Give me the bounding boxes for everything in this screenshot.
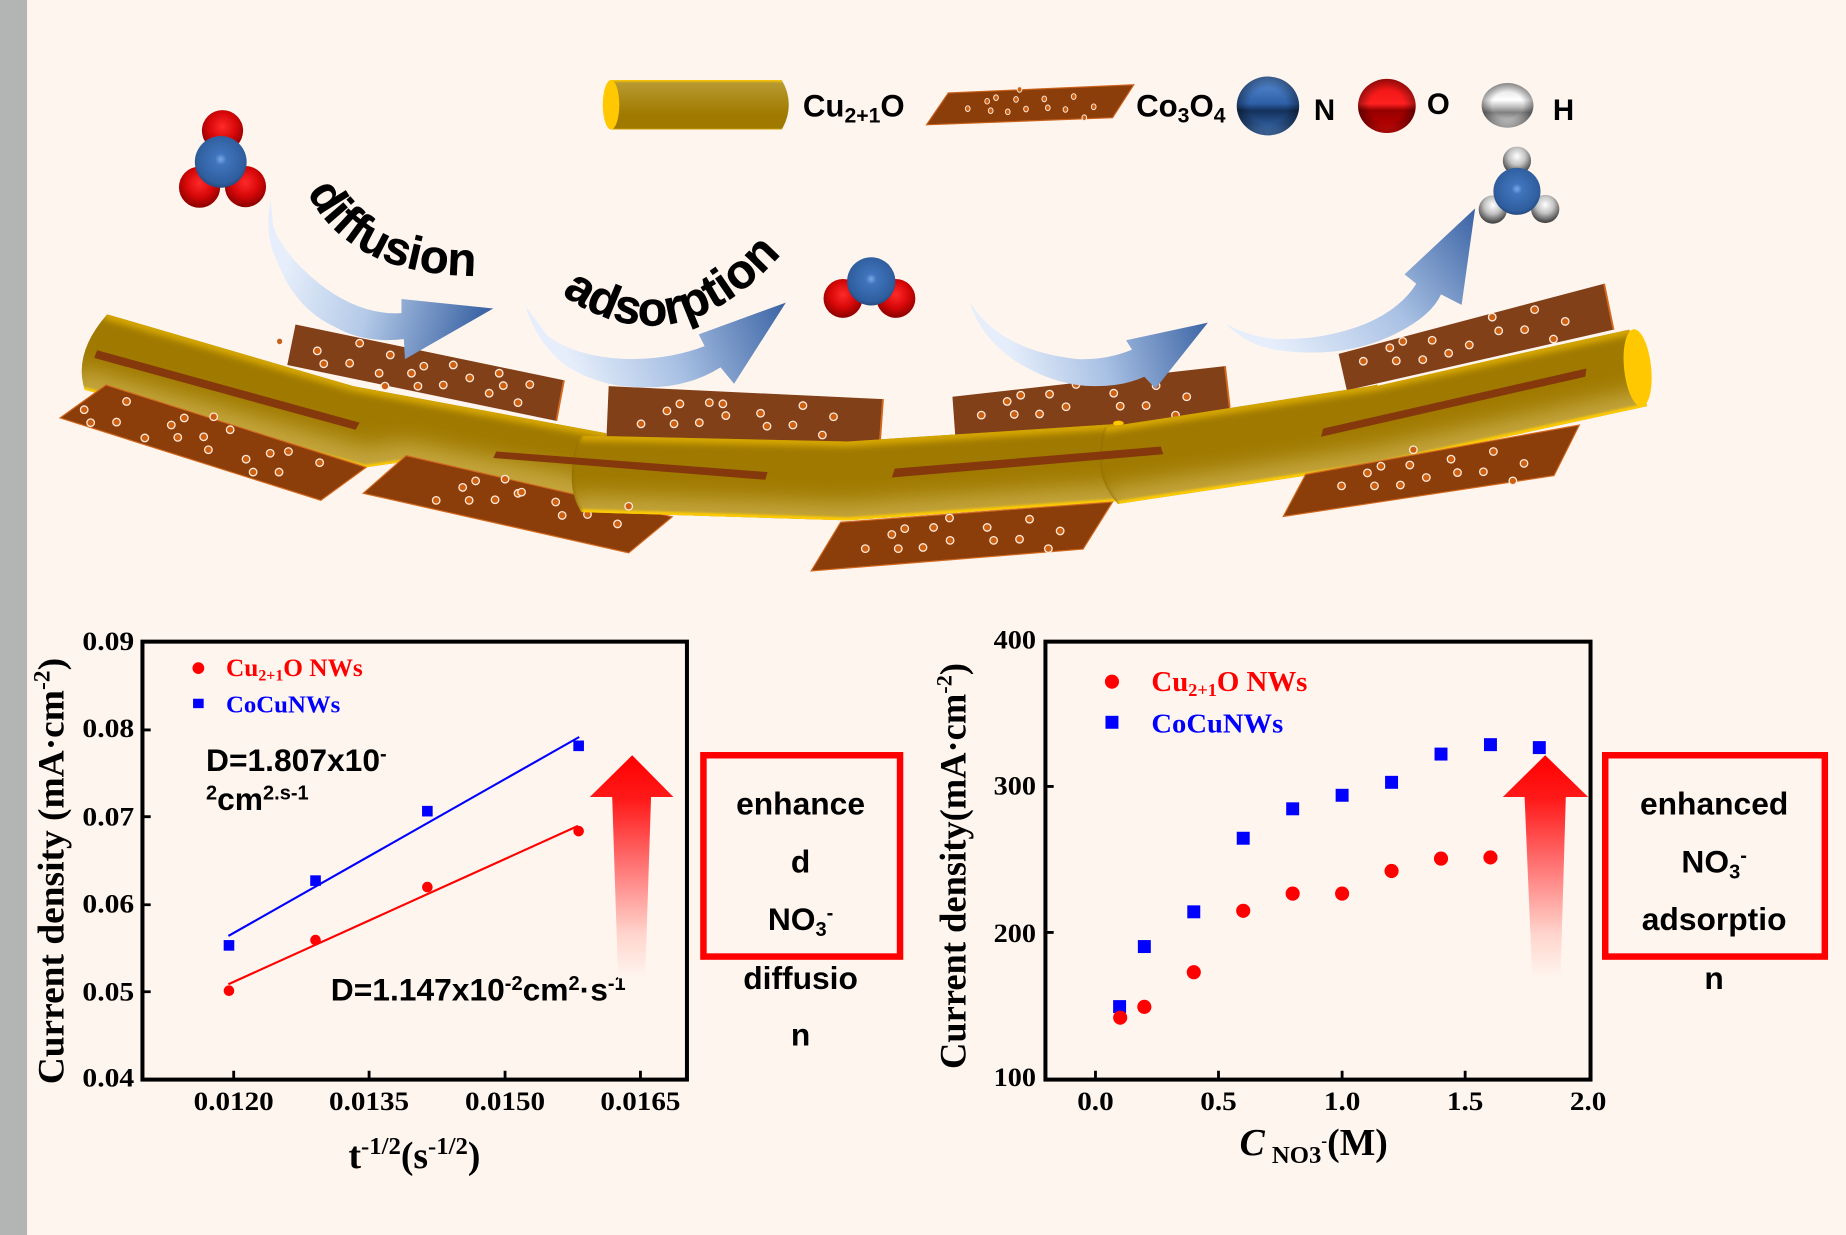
legend: O NWs xyxy=(1217,666,1307,698)
x tick labels: 2.0 xyxy=(1570,1087,1606,1116)
data: Cu2+1O NWs xyxy=(1113,850,1498,1025)
x axis title: ) xyxy=(468,1135,480,1177)
y axis title: -2 xyxy=(29,670,55,690)
legend xyxy=(192,654,363,718)
annotation: D Cu2+1O: -2 xyxy=(505,973,523,995)
x axis title: NO3 xyxy=(1272,1142,1321,1169)
label: adsorption: adsorption xyxy=(564,241,780,330)
data: CoCuNWs xyxy=(224,741,584,951)
annotation: D CoCuNWs: cm xyxy=(217,781,263,817)
annotation: D Cu2+1O: ·s xyxy=(580,972,608,1008)
arrow: diffusion xyxy=(268,200,493,359)
wire stripes xyxy=(94,350,1586,480)
wire end cap xyxy=(1620,328,1655,408)
plate: upper 1 xyxy=(287,324,564,421)
callout: enhanced NO3- diffusion: d xyxy=(791,843,810,879)
callout: enhanced NO3- adsorption: 3 xyxy=(1729,861,1740,883)
chart: diffusion current density xyxy=(29,627,687,1177)
arrow: adsorption xyxy=(526,303,786,387)
callout: enhanced NO3- adsorption xyxy=(1605,755,1825,996)
plate: lower 2 xyxy=(363,456,672,553)
legend label: Co3O4: 4 xyxy=(1214,104,1226,127)
y tick labels xyxy=(82,627,134,1093)
annotation: D Cu2+1O: -1 xyxy=(608,973,626,995)
legend label: Cu2+1O: 2+1 xyxy=(844,104,881,127)
callout: enhanced NO3- diffusion xyxy=(703,755,900,1052)
wire: middle tube xyxy=(572,424,1116,520)
x axis title: - xyxy=(1321,1131,1327,1151)
y tick labels xyxy=(994,626,1036,1092)
callout: enhanced NO3- diffusion: diffusio xyxy=(743,960,858,996)
x tick labels: 0.5 xyxy=(1200,1087,1237,1116)
y tick labels: 0.04 xyxy=(82,1064,134,1093)
plate: lower 4 xyxy=(1283,425,1579,516)
legend xyxy=(603,77,1574,135)
nanowire assembly xyxy=(59,284,1666,571)
x tick labels: 0.0120 xyxy=(194,1087,274,1116)
legend xyxy=(1105,666,1307,738)
legend: 2+1 xyxy=(1188,680,1217,700)
callout: enhanced NO3- adsorption: n xyxy=(1704,960,1724,996)
legend: Cu2+1O cylinder xyxy=(603,80,789,130)
stray particle xyxy=(277,339,282,344)
y axis title: Current density (mA·cm xyxy=(32,690,73,1084)
x axis title: (M) xyxy=(1327,1122,1388,1164)
plot frame and ticks xyxy=(142,642,687,1080)
x tick labels: 1.0 xyxy=(1324,1087,1360,1116)
legend: Co3O4 plate xyxy=(927,85,1134,125)
gap line above wire xyxy=(1377,329,1625,385)
arrow: enhanced diffusion xyxy=(590,755,673,978)
legend label: Co3O4: Co xyxy=(1136,89,1178,124)
plate: upper 2 xyxy=(606,386,883,447)
fit lines xyxy=(228,737,579,984)
callout: enhanced NO3- adsorption: adsorptio xyxy=(1642,901,1787,937)
molecule: NH3 xyxy=(1479,147,1559,224)
legend label: O: O xyxy=(1427,88,1450,121)
y tick labels: 0.05 xyxy=(82,978,134,1007)
legend: H sphere xyxy=(1482,83,1533,128)
callout: enhanced NO3- adsorption: enhanced xyxy=(1640,786,1788,822)
y tick labels: 100 xyxy=(994,1063,1036,1092)
y axis title: Current density(mA·cm xyxy=(932,694,973,1069)
wire: left tube xyxy=(82,314,606,494)
legend: Cu xyxy=(1151,666,1188,698)
annotation: D CoCuNWs xyxy=(206,742,387,817)
callout: enhanced NO3- diffusion: - xyxy=(827,902,833,924)
x axis title: C xyxy=(1240,1122,1266,1164)
y tick labels: 200 xyxy=(994,919,1036,948)
y tick labels: 0.06 xyxy=(82,889,134,918)
callout: enhanced NO3- diffusion: NO xyxy=(768,901,815,937)
legend label: Co3O4: O xyxy=(1189,89,1214,124)
x axis title: (s xyxy=(401,1135,428,1177)
plate: upper 3 xyxy=(952,366,1230,453)
arrow: surface step xyxy=(969,300,1208,389)
chart: adsorption current density xyxy=(931,626,1606,1169)
annotation: D Cu2+1O: D=1.147x10 xyxy=(331,972,505,1008)
legend: N sphere xyxy=(1237,77,1299,135)
legend label: H: H xyxy=(1553,94,1574,127)
annotation: D CoCuNWs: 2 xyxy=(206,782,217,804)
callout: enhanced NO3- diffusion: enhance xyxy=(736,786,865,822)
y axis title: ) xyxy=(932,663,973,675)
x tick labels xyxy=(1077,1087,1606,1116)
plate: lower 1 xyxy=(60,385,366,500)
wire: joint nub xyxy=(1113,421,1124,426)
y tick labels: 0.07 xyxy=(82,802,134,831)
molecule: NO3- xyxy=(179,110,266,208)
annotation: D Cu2+1O: 2 xyxy=(569,973,580,995)
wire: right tube xyxy=(1100,330,1647,504)
x tick labels: 1.5 xyxy=(1447,1087,1483,1116)
callout: enhanced NO3- adsorption: - xyxy=(1740,845,1747,867)
y tick labels: 400 xyxy=(994,626,1036,655)
x axis title: -1/2 xyxy=(361,1133,401,1160)
annotation: D CoCuNWs: - xyxy=(380,744,387,766)
x tick labels xyxy=(194,1087,680,1116)
data: Cu2+1O NWs xyxy=(224,826,584,996)
x tick labels: 0.0 xyxy=(1077,1087,1114,1116)
plot frame and ticks xyxy=(1045,642,1591,1080)
x axis title: -1/2 xyxy=(428,1133,468,1160)
arrow: enhanced adsorption xyxy=(1503,755,1588,978)
x axis title: t xyxy=(348,1135,361,1177)
callout: enhanced NO3- diffusion: n xyxy=(791,1016,810,1052)
x tick labels: 0.0165 xyxy=(600,1087,680,1116)
annotation: D CoCuNWs: D=1.807x10 xyxy=(206,742,380,778)
legend label: Co3O4: 3 xyxy=(1178,104,1190,127)
x tick labels: 0.0135 xyxy=(329,1087,409,1116)
y tick labels: 300 xyxy=(994,772,1036,801)
dots over wire xyxy=(625,446,1417,510)
callout: enhanced NO3- diffusion: 3 xyxy=(815,919,827,941)
plate: lower 3 xyxy=(811,502,1113,571)
legend label: Cu2+1O: Cu xyxy=(803,89,844,124)
legend: Cu xyxy=(226,654,258,682)
legend: O NWs xyxy=(283,654,363,682)
legend: CoCuNWs xyxy=(226,691,340,718)
x tick labels: 0.0150 xyxy=(465,1087,545,1116)
plate: upper 4 xyxy=(1339,284,1613,390)
y axis title: -2 xyxy=(931,675,956,694)
annotation: D Cu2+1O: cm xyxy=(523,972,569,1008)
arrow: desorption xyxy=(1226,208,1475,353)
y tick labels: 0.08 xyxy=(82,714,134,743)
y axis title: ) xyxy=(32,658,73,670)
legend label: Cu2+1O: O xyxy=(880,89,905,124)
y tick labels: 0.09 xyxy=(82,627,134,656)
legend: CoCuNWs xyxy=(1151,707,1283,738)
label: diffusion: diffusion xyxy=(310,184,474,276)
molecule: NO2 xyxy=(824,257,915,318)
legend: O sphere xyxy=(1358,79,1416,133)
legend label: N: N xyxy=(1314,94,1335,127)
annotation: D CoCuNWs: 2.s-1 xyxy=(263,782,309,804)
legend: 2+1 xyxy=(258,667,283,684)
data: CoCuNWs xyxy=(1113,738,1546,1013)
callout: enhanced NO3- adsorption: NO xyxy=(1681,843,1729,879)
